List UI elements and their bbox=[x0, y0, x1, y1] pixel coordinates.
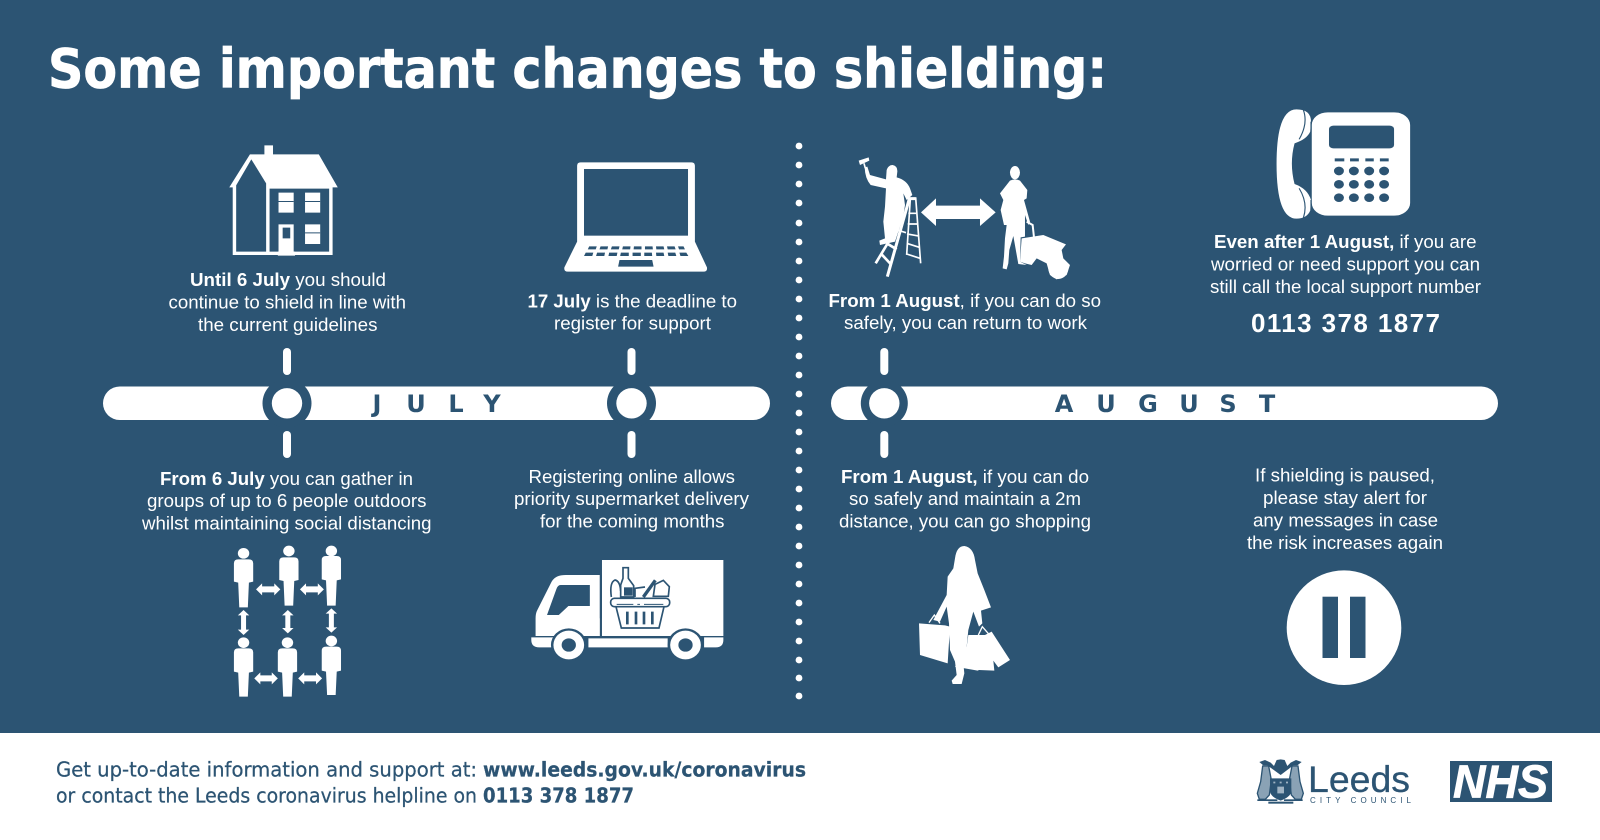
text: registering online: for the coming months bbox=[540, 510, 724, 532]
text: from 1 August shopping: so safely and maintain a 2m bbox=[849, 488, 1081, 509]
icon: woman with shopping bags bbox=[919, 546, 1010, 684]
icon: six people distancing bbox=[234, 546, 341, 697]
text: even after 1 August: still call the local support number bbox=[1210, 276, 1481, 297]
label: JULY: JULY bbox=[371, 390, 501, 418]
icon: delivery truck with basket bbox=[531, 560, 723, 662]
label: AUGUST: AUGUST bbox=[1055, 390, 1276, 418]
text: even after 1 August bbox=[1210, 231, 1481, 297]
text: from 1 August shopping bbox=[839, 466, 1091, 532]
text: from 1 August return to work: safely, you can return to work bbox=[844, 312, 1088, 333]
text: phone number: 0113 378 1877 bbox=[1251, 308, 1440, 338]
footer text: or contact the Leeds coronavirus helpline on bbox=[56, 784, 477, 808]
text: from 1 August shopping: distance, you can go shopping bbox=[839, 510, 1091, 532]
text: from 6 July bbox=[141, 468, 432, 534]
marker: 1 August bbox=[861, 348, 908, 458]
wordmark: Leeds bbox=[1308, 759, 1410, 800]
text: from 6 July: whilst maintaining social distancing bbox=[141, 512, 432, 534]
text: if shielding is paused: If shielding is paused, bbox=[1255, 464, 1435, 486]
footer text bbox=[56, 758, 806, 808]
text: 17 July bbox=[528, 290, 737, 334]
text: if shielding is paused: please stay alert for bbox=[1263, 487, 1427, 508]
divider: dotted line bbox=[796, 143, 802, 699]
text: if shielding is paused: any messages in case bbox=[1253, 510, 1438, 530]
logo: NHS: NHS bbox=[1453, 756, 1548, 808]
text: if shielding is paused: the risk increases again bbox=[1247, 532, 1443, 553]
text: from 1 August return to work bbox=[828, 290, 1101, 333]
text: until 6 July: Until 6 July you should bbox=[190, 269, 386, 290]
basket of groceries bbox=[611, 568, 670, 628]
text: if shielding is paused bbox=[1247, 464, 1443, 553]
title: Some important changes to shielding: bbox=[48, 36, 1107, 100]
timeline: July bbox=[103, 348, 770, 458]
logo: Leeds City Council bbox=[1257, 759, 1412, 805]
text: from 6 July: From 6 July you can gather in bbox=[160, 468, 413, 489]
sub wordmark: CITY COUNCIL bbox=[1310, 796, 1412, 805]
text: from 1 August return to work: From 1 August, if you can do so bbox=[828, 290, 1101, 311]
timeline: August bbox=[831, 348, 1498, 458]
text: 17 July: 17 July is the deadline to bbox=[528, 290, 737, 312]
footer text: 0113 378 1877 bbox=[483, 784, 634, 808]
crest bbox=[1257, 759, 1303, 804]
text: registering online: priority supermarket delivery bbox=[514, 488, 750, 509]
icon: house bbox=[229, 145, 338, 256]
text: 17 July: register for support bbox=[554, 312, 712, 334]
icon: laptop bbox=[564, 162, 707, 272]
text: until 6 July bbox=[168, 269, 406, 335]
icon: pause button bbox=[1287, 570, 1401, 685]
text: from 6 July: groups of up to 6 people outdoors bbox=[147, 490, 426, 511]
footer white panel bbox=[0, 733, 1600, 840]
text: even after 1 August: worried or need support you can bbox=[1210, 254, 1480, 274]
text: registering online bbox=[514, 466, 750, 532]
text: registering online: Registering online allows bbox=[528, 466, 735, 487]
text: from 1 August shopping: From 1 August, if you can do bbox=[841, 466, 1089, 487]
text: until 6 July: the current guidelines bbox=[198, 314, 378, 335]
text: until 6 July: continue to shield in line with bbox=[168, 292, 406, 312]
footer text: Get up-to-date information and support at: bbox=[56, 758, 477, 782]
footer text: www.leeds.gov.uk/coronavirus bbox=[483, 758, 806, 782]
icon: painter, arrow and wheelbarrow worker bbox=[859, 157, 1070, 279]
marker: 6 July bbox=[262, 348, 312, 458]
icon: telephone bbox=[1277, 109, 1410, 219]
text: even after 1 August: Even after 1 August, if you are bbox=[1214, 231, 1476, 252]
marker: 17 July bbox=[607, 348, 656, 458]
